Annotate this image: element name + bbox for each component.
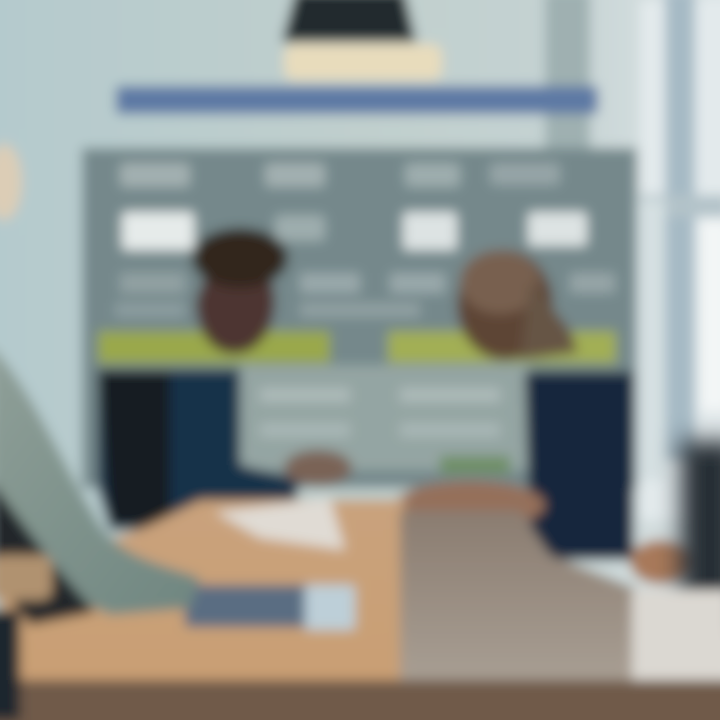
person right xyxy=(395,250,690,584)
person left xyxy=(98,228,352,530)
board text blocks xyxy=(115,163,615,437)
window and columns xyxy=(545,0,720,520)
left edge glow xyxy=(0,144,22,220)
title xyxy=(116,86,598,114)
highlight bands xyxy=(98,331,616,474)
right chair xyxy=(680,440,720,630)
laptop xyxy=(185,585,355,630)
table xyxy=(0,498,720,720)
pendant lamp xyxy=(282,0,442,80)
wall board xyxy=(82,148,637,488)
foreground person left xyxy=(0,345,200,720)
